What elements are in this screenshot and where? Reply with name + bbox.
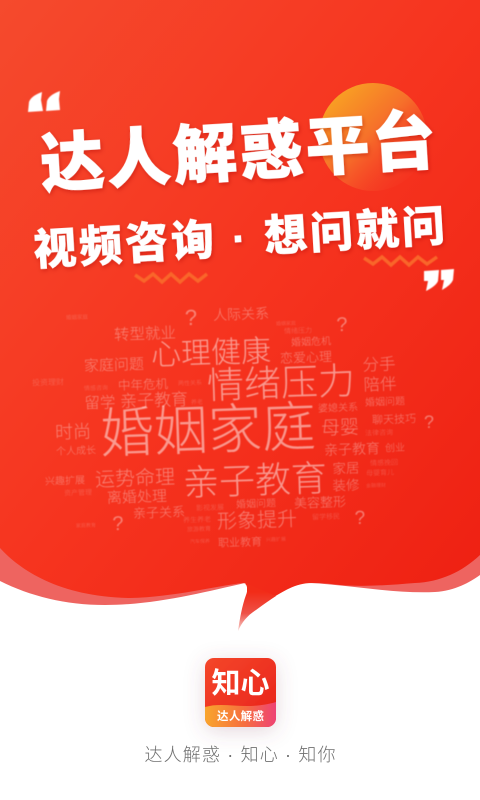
speech bubble lower pink layer — [0, 530, 480, 605]
question marks: ? — [336, 314, 348, 336]
speech bubble red background — [0, 0, 480, 598]
secondary topics — [45, 305, 416, 550]
minor topics: 婚姻家庭 — [276, 320, 296, 327]
zigzag accent under 想问就问 — [364, 257, 437, 265]
secondary topics: 分手 — [362, 354, 396, 375]
minor topics: 养老 — [191, 398, 203, 406]
minor topics: 情感咨询 — [84, 384, 108, 392]
minor topics: 资产管理 — [64, 488, 92, 497]
secondary topics: 装修 — [332, 478, 360, 493]
question marks: ? — [112, 513, 124, 535]
zigzag accent under 视频咨询 — [135, 274, 207, 282]
minor topics: 情绪压力 — [284, 326, 312, 335]
secondary topics: 婚姻危机 — [291, 334, 331, 349]
secondary topics: 家居 — [332, 461, 360, 476]
minor topics: 两性关系 — [178, 379, 202, 387]
secondary topics: 离婚处理 — [107, 488, 167, 507]
secondary topics: 运势命理 — [95, 466, 175, 491]
secondary topics: 个人成长 — [56, 444, 96, 458]
minor topics: 影视发展 — [196, 503, 224, 512]
secondary topics: 职业教育 — [218, 534, 262, 550]
secondary topics: 兴趣扩展 — [45, 473, 85, 488]
minor topics: 法律咨询 — [365, 428, 393, 437]
minor topics: 金融理财 — [366, 482, 386, 489]
secondary topics: 恋爱心理 — [280, 349, 332, 366]
secondary topics: 形象提升 — [217, 508, 297, 533]
app logo: 达人解惑 — [217, 709, 264, 723]
secondary topics: 亲子教育 — [120, 390, 188, 411]
word cloud — [32, 305, 434, 550]
secondary topics: 亲子教育 — [324, 440, 380, 458]
secondary topics: 陪伴 — [363, 374, 397, 395]
secondary topics: 留学 — [84, 393, 116, 413]
minor topics — [32, 313, 398, 545]
secondary topics: 中年危机 — [118, 377, 169, 393]
app logo — [205, 658, 276, 727]
minor topics: 留学移民 — [312, 512, 340, 521]
minor topics: 母婴育儿 — [366, 468, 394, 477]
subtitle: 视频咨询 · 想问就问: 视频咨询 · 想问就问 — [32, 203, 446, 275]
closing quotation mark — [424, 269, 454, 291]
minor topics: 养生养老 — [183, 515, 211, 524]
secondary topics: 婚姻问题 — [365, 395, 405, 409]
main topics — [99, 335, 356, 504]
decorative orange circle — [319, 83, 427, 191]
secondary topics: 聊天技巧 — [372, 412, 416, 427]
minor topics: 兴趣扩展 — [266, 536, 286, 543]
main topics: 心理健康 — [150, 335, 272, 372]
minor topics: 情感挽回 — [370, 458, 398, 467]
secondary topics: 美容整形 — [294, 494, 346, 511]
secondary topics: 人际关系 — [213, 305, 269, 323]
secondary topics: 婚姻问题 — [236, 497, 276, 511]
secondary topics: 转型就业 — [114, 324, 176, 344]
minor topics: 婚姻家庭 — [66, 313, 89, 321]
speech bubble tail — [238, 583, 276, 631]
question marks — [112, 305, 434, 535]
secondary topics: 亲子关系 — [133, 504, 185, 521]
title: 达人解惑平台: 达人解惑平台 — [38, 105, 438, 201]
minor topics: 汽车保养 — [190, 538, 210, 545]
main topics: 亲子教育 — [182, 457, 328, 504]
minor topics: 旅游教育 — [187, 525, 211, 533]
main topics: 婚姻家庭 — [99, 397, 317, 465]
question marks: ? — [184, 305, 198, 330]
secondary topics: 母婴 — [321, 417, 359, 440]
secondary topics: 家庭问题 — [84, 356, 144, 375]
secondary topics: 创业 — [385, 442, 405, 454]
question marks: ? — [354, 508, 366, 529]
secondary topics: 婆媳关系 — [318, 400, 358, 415]
opening quotation mark — [28, 91, 60, 112]
minor topics: 投资理财 — [32, 376, 64, 388]
main topics: 情绪压力 — [206, 360, 356, 407]
minor topics: 家庭教育 — [76, 522, 96, 529]
secondary topics: 时尚 — [55, 421, 91, 443]
question marks: ? — [424, 412, 434, 432]
app logo: 知心 — [212, 667, 270, 700]
tagline: 达人解惑 · 知心 · 知你 — [144, 745, 336, 765]
